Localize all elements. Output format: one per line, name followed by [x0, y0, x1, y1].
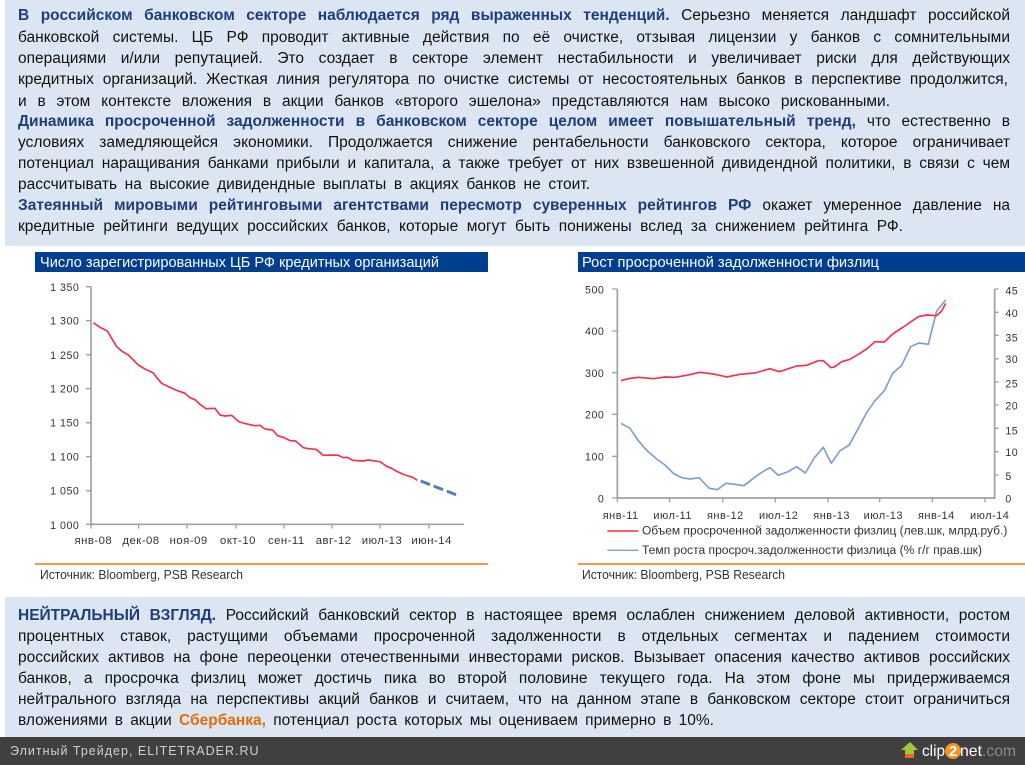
- x axis labels: июл-11: [653, 510, 692, 522]
- right axis labels: [1005, 285, 1018, 505]
- logo: clip2net: 2: [949, 743, 957, 760]
- paragraph: overdue debt: рассчитывать на высокие дивидендные выплаты в акциях банков не стоит.: [18, 176, 590, 193]
- divider and source: left chart: [35, 563, 488, 585]
- legend: growth rate: Темп роста просроч.задолженности физлица (% г/г прав.шк): [642, 543, 982, 557]
- right axis labels: 15: [1005, 425, 1018, 437]
- chart title: overdue retail debt: [578, 252, 1025, 272]
- logo: clip2net: clip: [922, 743, 945, 760]
- x axis labels: сен-11: [268, 535, 305, 547]
- logo: clip2net: [901, 742, 1016, 760]
- right axis labels: 5: [1005, 471, 1012, 483]
- right axis labels: 0: [1005, 493, 1012, 505]
- line chart: overdue retail debt growth: [585, 284, 1018, 557]
- left axis labels: 200: [585, 410, 604, 422]
- left axis labels: 100: [585, 451, 604, 463]
- line chart: number of credit organisations: [50, 282, 464, 547]
- conclusion text: НЕЙТРАЛЬНЫЙ ВЗГЛЯД. Российский банковский сектор в настоящее время ослаблен снижением деловой активности, ростом: [18, 607, 1010, 624]
- x axis labels: янв-08: [74, 535, 112, 547]
- x axis labels: [603, 510, 1009, 522]
- y axis labels: 1 250: [50, 350, 79, 362]
- paragraph: trends: кредитных организаций. Жесткая линия регулятора по очистке системы от несостоятельных банков в перспективе продолжится,: [18, 71, 1008, 88]
- footer caption: Элитный Трейдер, ELITETRADER.RU: [10, 744, 260, 758]
- y axis labels: 1 000: [50, 520, 79, 532]
- chart title: overdue retail debt: Рост просроченной задолженности физлиц: [582, 255, 879, 271]
- y axis labels: 1 300: [50, 316, 79, 328]
- conclusion text: нейтрального взгляда на перспективы акций банков и считаем, что на данном этапе в банковском секторе стоит ограничиться: [18, 691, 1010, 708]
- paragraph: trends: и в этом контексте вложения в акции банков «второго эшелона» представляются нам высоко рискованными.: [18, 93, 890, 110]
- paragraph: trends: операциями и/или репутацией. Это создает в секторе элемент нестабильности и увеличивает риски для действующих: [18, 50, 1010, 67]
- divider and source: right chart: [578, 563, 1025, 585]
- legend: volume: Объем просроченной задолженности физлиц (лев.шк, млрд.руб.): [642, 524, 1007, 538]
- logo: clip2net: net: [960, 743, 983, 760]
- paragraph: overdue debt: [18, 113, 1010, 193]
- paragraph: overdue debt: Динамика просроченной задолженности в банковском секторе целом имеет повышательный тренд, что естественно в: [18, 113, 1010, 130]
- paragraph: sovereign ratings: Затеянный мировыми рейтинговыми агентствами пересмотр суверенных рейтингов РФ окажет умеренное давление на: [18, 197, 1010, 214]
- x axis labels: янв-14: [918, 510, 955, 522]
- conclusion text: процентных ставок, растущими объемами просроченной задолженности в отдельных сегментах и падением стоимости: [18, 628, 1010, 645]
- paragraph: sovereign ratings: [18, 197, 1010, 235]
- right axis labels: 25: [1005, 378, 1018, 390]
- panel: neutral view: [5, 597, 1025, 737]
- conclusion text: вложениями в акции Сбербанка, потенциал роста которых мы оцениваем примерно в 10%.: [18, 712, 714, 729]
- x axis labels: дек-08: [122, 535, 160, 547]
- panel: top text: [5, 0, 1025, 246]
- right axis labels: 35: [1005, 332, 1018, 344]
- footer bar: [0, 737, 1025, 765]
- y axis labels: 1 050: [50, 486, 79, 498]
- right axis labels: 10: [1005, 447, 1018, 459]
- left axis labels: 0: [598, 493, 604, 505]
- right axis labels: 30: [1005, 354, 1018, 366]
- x axis labels: ноя-09: [170, 535, 208, 547]
- logo: clip2net: .com: [982, 743, 1016, 760]
- paragraph: trends: В российском банковском секторе наблюдается ряд выраженных тенденций. Серьезно меняется ландшафт российской: [18, 7, 1010, 24]
- x axis labels: авг-12: [316, 535, 352, 547]
- blue growth-rate line: [621, 300, 946, 490]
- x axis labels: июл-13: [864, 510, 903, 522]
- right axis labels: 45: [1005, 285, 1018, 297]
- red volume line: [621, 303, 946, 381]
- x axis labels: окт-10: [220, 535, 256, 547]
- left axis labels: 500: [585, 284, 604, 296]
- axes: [86, 287, 464, 529]
- left axis labels: 400: [585, 326, 604, 338]
- conclusion text: [18, 606, 1010, 729]
- left axis labels: [585, 284, 604, 505]
- divider and source: right chart: Источник: Bloomberg, PSB Research: [582, 568, 785, 582]
- conclusion text: российских активов на фоне переоценки отечественными инвесторами рисков. Вызывает опасения качество активов российских: [18, 649, 1010, 666]
- paragraph: overdue debt: потенциал наращивания банками прибыли и капитала, а также требует от них взвешенной дивидендной политики, в связи с чем: [18, 155, 1010, 172]
- right axis labels: 20: [1005, 400, 1018, 412]
- divider and source: left chart: Источник: Bloomberg, PSB Research: [40, 568, 243, 582]
- left axis labels: 300: [585, 368, 604, 380]
- x axis labels: [74, 535, 452, 547]
- y axis labels: 1 150: [50, 418, 79, 430]
- x axis labels: июл-13: [362, 535, 402, 547]
- right axis labels: 40: [1005, 308, 1018, 320]
- blue forecast line: [421, 481, 457, 495]
- y axis labels: [50, 282, 79, 532]
- y axis labels: 1 100: [50, 452, 79, 464]
- x axis labels: июн-14: [411, 535, 452, 547]
- x axis labels: июл-12: [759, 510, 798, 522]
- x axis labels: янв-13: [813, 510, 850, 522]
- x axis labels: янв-11: [603, 510, 639, 522]
- conclusion text: банков, а просрочка физлиц может достичь пика во второй половине текущего года. На этом фоне мы придерживаемся: [18, 670, 1010, 687]
- chart title: credit organisations: Число зарегистрированных ЦБ РФ кредитных организаций: [40, 255, 439, 271]
- axes: [612, 289, 999, 502]
- paragraph: overdue debt: условиях замедляющейся экономики. Продолжается снижение рентабельности банковского сектора, которое ограничивает: [18, 134, 1010, 151]
- x axis labels: июл-14: [970, 510, 1009, 522]
- y axis labels: 1 350: [50, 282, 79, 294]
- x axis labels: янв-12: [707, 510, 744, 522]
- red data line: [93, 323, 417, 480]
- paragraph: trends: [18, 7, 1010, 110]
- paragraph: sovereign ratings: кредитные рейтинги ведущих российских банков, которые могут быть понижены вслед за снижением рейтинга РФ.: [18, 218, 903, 235]
- y axis labels: 1 200: [50, 384, 79, 396]
- paragraph: trends: банковской системы. ЦБ РФ проводит активные действия по её очистке, отзывая лицензии у банков с сомнительными: [18, 29, 1010, 46]
